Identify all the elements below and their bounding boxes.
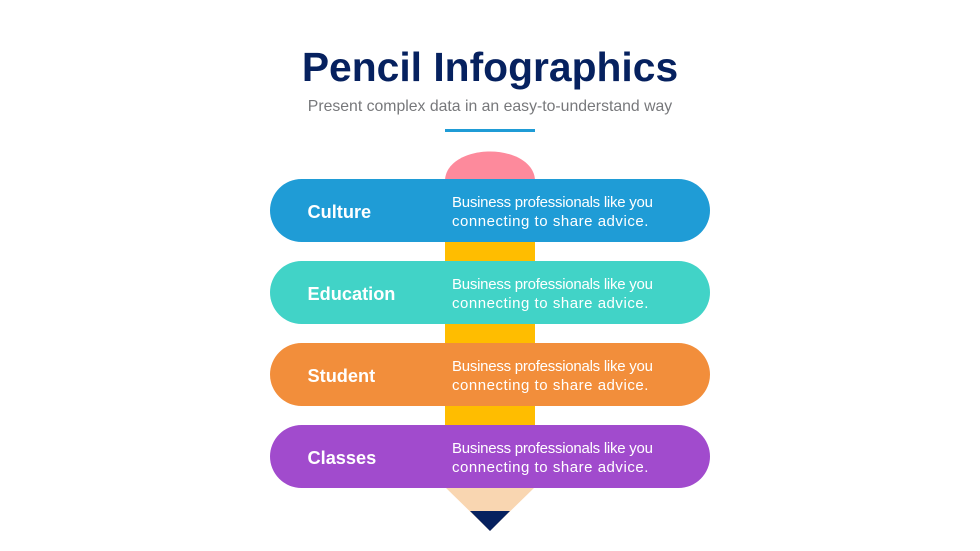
title: Pencil Infographics: [302, 44, 678, 90]
education description: Business professionals like you: [452, 276, 653, 292]
classes heading: Classes: [308, 448, 376, 468]
pencil lead point: [470, 511, 510, 531]
pencil body: [445, 185, 535, 435]
culture description: connecting to share advice.: [452, 212, 649, 230]
title underline: [445, 129, 535, 132]
subtitle: Present complex data in an easy-to-understand way: [308, 98, 672, 115]
panel: classes: [270, 424, 710, 488]
panel: culture: [270, 178, 710, 242]
pencil wood tip: [445, 487, 535, 531]
culture heading: Culture: [308, 202, 371, 222]
student description: [452, 358, 653, 394]
panel: education: [270, 260, 710, 324]
education description: [452, 276, 653, 312]
student heading: Student: [308, 366, 375, 386]
education description: connecting to share advice.: [452, 294, 649, 312]
student description: Business professionals like you: [452, 358, 653, 374]
culture description: Business professionals like you: [452, 194, 653, 210]
classes description: connecting to share advice.: [452, 458, 649, 476]
panel: student: [270, 342, 710, 406]
education heading: Education: [308, 284, 395, 304]
classes description: [452, 440, 653, 476]
icon: pencil eraser: [445, 152, 535, 185]
culture description: [452, 194, 653, 230]
student description: connecting to share advice.: [452, 376, 649, 394]
classes description: Business professionals like you: [452, 440, 653, 456]
